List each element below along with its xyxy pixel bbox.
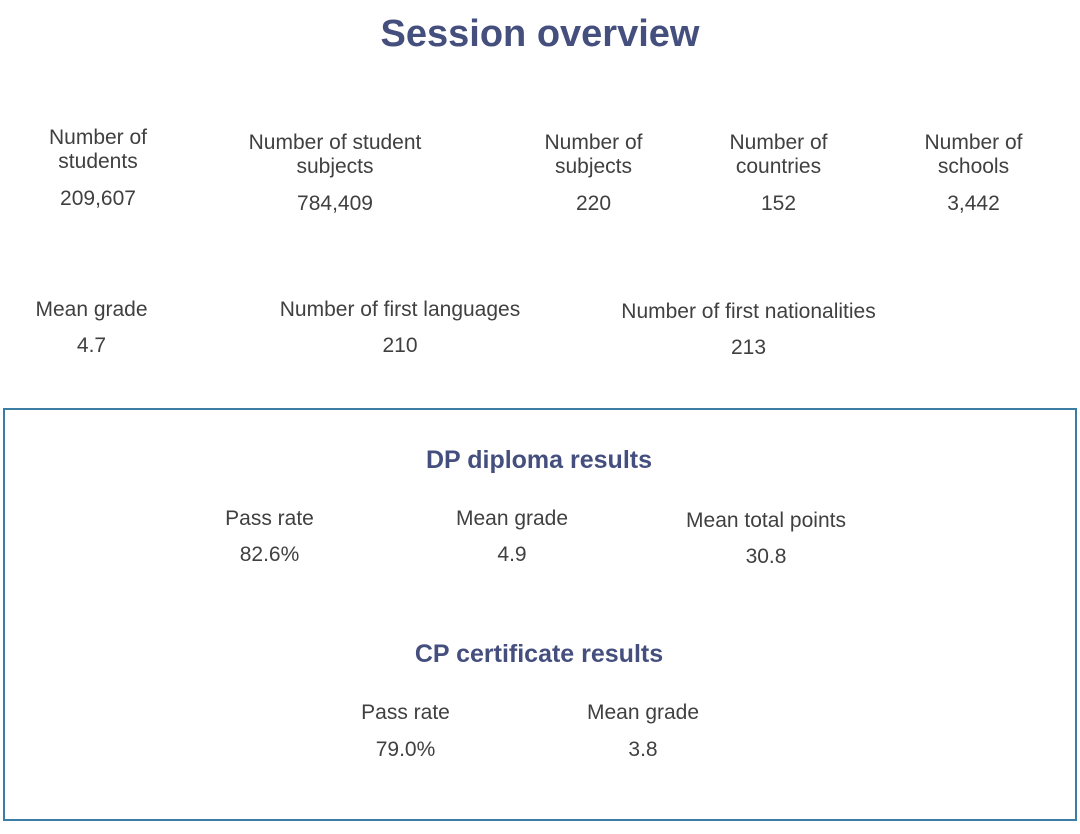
- stat: number of students: [49, 126, 147, 210]
- stat: number of first languages: Number of first languages: [280, 298, 520, 321]
- stat: number of schools: schools: [938, 155, 1009, 178]
- stat: number of countries: 152: [761, 192, 796, 215]
- stat: number of student subjects: Number of student: [249, 131, 421, 154]
- stat: DP mean grade: 4.9: [497, 543, 527, 566]
- heading: CP certificate results: CP certificate results: [415, 640, 663, 668]
- stat: CP mean grade: 3.8: [628, 738, 658, 761]
- stat: CP mean grade: [587, 701, 699, 761]
- stat: number of first languages: 210: [382, 334, 418, 357]
- stat: mean grade: 4.7: [77, 334, 106, 357]
- stat: number of first nationalities: Number of first nationalities: [621, 300, 876, 323]
- stat: number of students: students: [58, 150, 138, 173]
- stat: DP pass rate: [225, 507, 314, 566]
- stat: CP pass rate: [361, 701, 450, 761]
- stat: number of subjects: subjects: [555, 155, 632, 178]
- stat: number of schools: [924, 131, 1023, 215]
- stat: number of schools: 3,442: [947, 192, 1000, 215]
- stat: DP pass rate: Pass rate: [225, 507, 314, 530]
- stat: number of subjects: Number of: [544, 131, 643, 154]
- stat: CP mean grade: Mean grade: [587, 701, 699, 724]
- stat: DP pass rate: 82.6%: [240, 543, 299, 566]
- stat: number of countries: Number of: [729, 131, 828, 154]
- heading: DP diploma results: DP diploma results: [426, 446, 652, 474]
- stat: DP mean grade: Mean grade: [456, 507, 568, 530]
- panel: results: [3, 408, 1077, 821]
- stat: DP mean total points: Mean total points: [686, 509, 846, 532]
- stat: number of first languages: [280, 298, 520, 357]
- stat: number of first nationalities: [621, 300, 876, 359]
- stat: number of countries: countries: [736, 155, 821, 178]
- stat: number of subjects: [544, 131, 643, 215]
- stat: number of schools: Number of: [924, 131, 1023, 154]
- stat: number of student subjects: 784,409: [297, 192, 373, 215]
- stat: mean grade: Mean grade: [35, 298, 148, 321]
- stat: DP mean total points: 30.8: [746, 545, 786, 568]
- stat: CP pass rate: Pass rate: [361, 701, 450, 724]
- title: Session overview: [381, 13, 699, 55]
- stat: mean grade: [35, 298, 148, 357]
- stat: number of student subjects: [249, 131, 422, 215]
- stat: number of first nationalities: 213: [731, 336, 766, 359]
- stat: DP mean total points: [686, 509, 846, 568]
- stat: number of students: 209,607: [60, 187, 136, 210]
- stat: CP pass rate: 79.0%: [376, 738, 435, 761]
- stat: number of students: Number of: [49, 126, 147, 149]
- stat: number of countries: [729, 131, 828, 215]
- stat: DP mean grade: [456, 507, 568, 566]
- stat: number of student subjects: subjects: [296, 155, 374, 178]
- stat: number of subjects: 220: [576, 192, 611, 215]
